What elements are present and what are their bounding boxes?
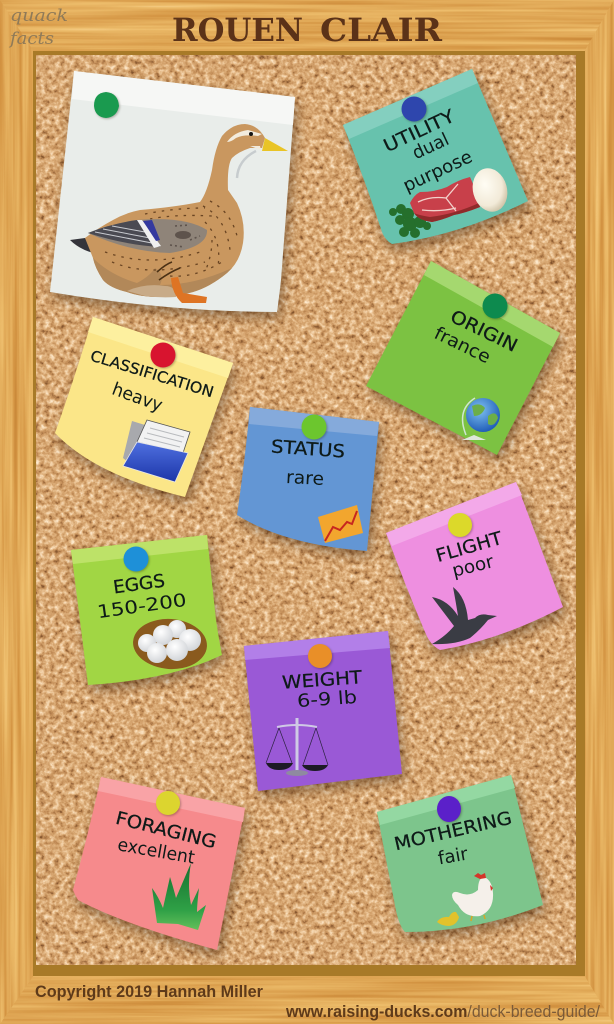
icon: folder [123, 420, 190, 482]
panel: classification note [55, 317, 233, 497]
panel: mothering note [377, 775, 543, 932]
pin: yellow [156, 791, 180, 815]
heading: origin: ORIGIN [447, 306, 521, 357]
panel: foraging note [73, 777, 245, 950]
text: poor: poor [450, 551, 496, 582]
panel: weight note [244, 631, 402, 791]
illustration: duck [70, 124, 288, 303]
text: rare: rare [286, 467, 325, 490]
pin: blue [124, 546, 148, 572]
icon: globe [462, 398, 500, 440]
icon: grass [152, 863, 206, 930]
panel: status note [237, 407, 379, 551]
logo text: quack facts: quack [10, 6, 68, 26]
text: 150-200: 150-200 [96, 590, 188, 623]
pin: green [94, 92, 119, 118]
pin: orange [308, 644, 332, 668]
pin: yellow [448, 513, 472, 537]
website url: www.raising-ducks.com/duck-breed-guide/ [285, 1002, 600, 1021]
heading: status: STATUS [270, 436, 346, 463]
heading: foraging: FORAGING [113, 808, 218, 853]
text: fair: fair [436, 843, 470, 869]
icon: nest [131, 616, 209, 672]
title: CLAIR [320, 11, 442, 49]
icon: hen and chick [437, 873, 493, 926]
heading: eggs: EGGS [112, 570, 166, 599]
title [172, 11, 442, 49]
text: excellent: excellent [116, 834, 196, 869]
panel: flight note [386, 482, 563, 650]
pin: purple [437, 796, 461, 822]
icon: balance scale [266, 718, 328, 776]
text: heavy: heavy [109, 379, 165, 416]
panel: duck photo note [50, 71, 295, 312]
title: ROUEN [172, 11, 303, 49]
heading: flight: FLIGHT [434, 528, 506, 567]
icon: meat, egg and parsley [389, 164, 512, 238]
icon: flying duck silhouette [432, 587, 497, 644]
panel: eggs note [71, 535, 222, 685]
logo text: quack facts: facts [8, 29, 54, 49]
text: dual purpose: dual [409, 129, 452, 164]
cork board [36, 55, 576, 965]
pin: dark green [482, 294, 508, 318]
pin: light green [302, 414, 326, 440]
heading: mothering: MOTHERING [392, 808, 514, 855]
heading: classification: CLASSIFICATION [88, 347, 216, 401]
icon: chart [318, 505, 363, 543]
copyright: Copyright 2019 Hannah Miller [35, 982, 263, 1001]
text: france: france [431, 323, 494, 368]
heading: weight: WEIGHT [281, 667, 364, 694]
heading: utility: UTILITY [380, 105, 459, 157]
pin: blue [402, 96, 426, 122]
text: dual purpose: purpose [400, 146, 476, 197]
pin: red [150, 342, 176, 368]
logo text: quack facts [8, 6, 68, 49]
text: 6-9 lb: 6-9 lb [296, 687, 358, 712]
panel: origin note [366, 261, 560, 455]
panel: utility note [343, 69, 528, 244]
